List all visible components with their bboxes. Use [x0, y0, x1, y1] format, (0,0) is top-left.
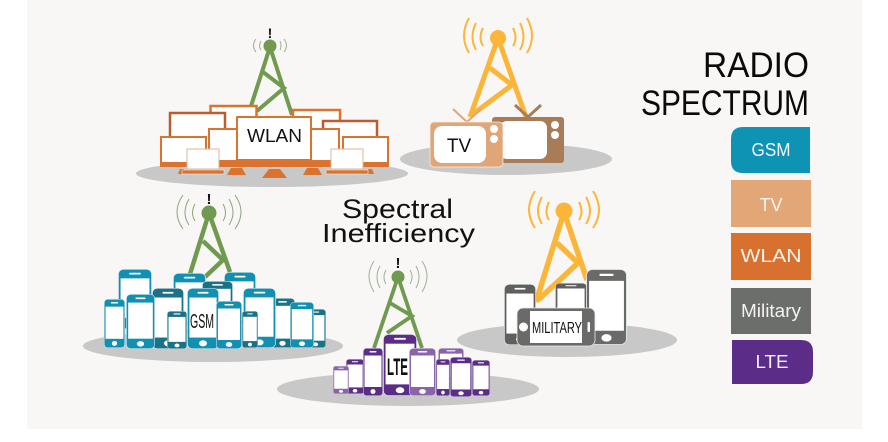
- legend item: LTE: [732, 340, 813, 384]
- LTE shadow ellipse: [277, 372, 539, 406]
- WLAN shadow ellipse: [136, 160, 408, 187]
- Military label: MILITARY: [532, 320, 582, 337]
- panel: TV cluster: [400, 18, 612, 175]
- Military shadow ellipse: [457, 323, 677, 357]
- legend item: GSM: GSM: [752, 140, 790, 160]
- front television: [430, 109, 503, 167]
- panel: Military cluster: [457, 191, 677, 357]
- LTE alert mark: !: [396, 255, 400, 272]
- legend item: TV: TV: [759, 195, 783, 215]
- legend item: WLAN: WLAN: [740, 246, 802, 266]
- GSM shadow ellipse: [83, 330, 343, 362]
- legend: [731, 127, 813, 384]
- LTE tower: [369, 261, 427, 348]
- TV shadow ellipse: [400, 143, 612, 175]
- title: Radio Spectrum: [641, 46, 809, 123]
- GSM alert mark: !: [206, 191, 212, 208]
- GSM label: GSM: [190, 311, 214, 333]
- GSM tower: [177, 195, 241, 277]
- legend item: TV: [731, 180, 811, 227]
- panel: LTE cluster: LTE: [387, 354, 408, 381]
- Military tower: [529, 191, 599, 302]
- title: Radio Spectrum: RADIO: [703, 46, 809, 85]
- legend item: WLAN: [731, 233, 811, 280]
- title: Radio Spectrum: SPECTRUM: [641, 84, 809, 123]
- WLAN monitors: [160, 106, 389, 178]
- TV tower: [464, 18, 532, 117]
- TV label: TV: [447, 136, 471, 157]
- back television: [492, 105, 564, 163]
- legend item: Military: [731, 288, 811, 334]
- LTE phones: [333, 334, 490, 397]
- WLAN label: WLAN: [247, 126, 302, 146]
- WLAN alert mark: !: [268, 25, 272, 41]
- panel: WLAN cluster: [136, 25, 408, 187]
- WLAN tower: [251, 39, 292, 115]
- Military phones: [504, 269, 626, 346]
- WLAN laptops: [182, 149, 368, 174]
- panel: LTE cluster: [277, 255, 539, 406]
- legend item: Military: Military: [741, 301, 801, 321]
- panel: GSM cluster: [83, 191, 343, 362]
- title: Spectral Inefficiency: [322, 194, 475, 248]
- legend item: GSM: [731, 127, 810, 173]
- GSM phones: [104, 269, 326, 349]
- title: Spectral Inefficiency: Inefficiency: [322, 218, 475, 248]
- legend item: LTE: LTE: [756, 352, 788, 372]
- title: Spectral Inefficiency: Spectral: [342, 194, 453, 224]
